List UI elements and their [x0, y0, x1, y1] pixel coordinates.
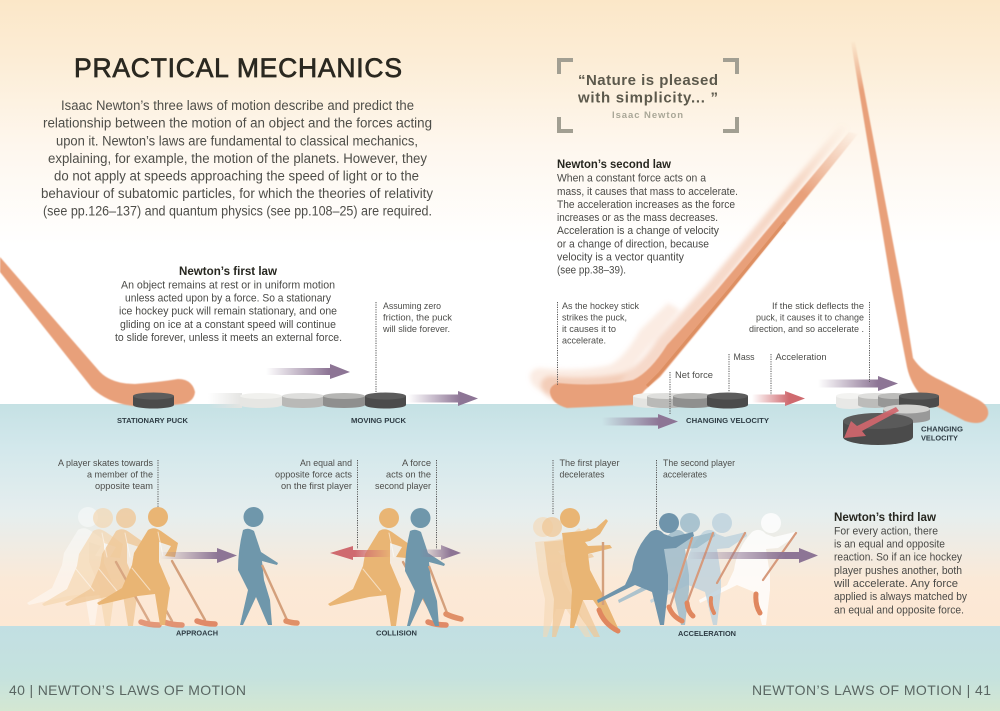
text: Newton's first law: ice hockey puck will remain stationary, and one — [119, 306, 337, 318]
callout: as the stick strikes: strikes the puck, — [562, 312, 627, 324]
callout: stick deflects the puck — [749, 301, 870, 382]
callout: stick deflects the puck: puck, it causes it to change — [756, 312, 864, 324]
figure: approaching player — [97, 507, 215, 625]
intro text block: Isaac Newton’s three laws of motion describe and predict the — [61, 98, 414, 113]
icons: trailing hockey sticks — [669, 533, 796, 621]
callout: second player accelerates: accelerates — [663, 470, 707, 480]
title: PRACTICAL MECHANICS — [74, 53, 402, 83]
quote with corner brackets: with simplicity... ” — [577, 90, 718, 107]
arrow: deflected puck motion — [818, 376, 898, 391]
text: Newton's third law: player pushes another, both — [834, 565, 962, 577]
callout: player skates towards: opposite team — [95, 481, 153, 492]
label: collision: COLLISION — [376, 628, 417, 638]
callout: first player decelerates — [553, 458, 620, 515]
callout: force on second player: second player — [375, 481, 431, 492]
arrow: approach motion — [160, 548, 237, 563]
figure: decelerating player — [560, 508, 618, 631]
callout: acceleration: Acceleration — [776, 352, 826, 363]
background: sky gradient — [0, 0, 1000, 245]
callout: mass: Mass — [734, 352, 755, 363]
figure: colliding blue player — [405, 508, 461, 626]
text: Newton's second law: Newton’s second law — [557, 159, 671, 171]
background: bottom ice band — [0, 626, 1000, 711]
figure: approaching player ghosts — [27, 507, 146, 626]
text: Newton's second law: When a constant force acts on a — [557, 173, 707, 185]
callout: equal and opposite force: opposite force acts — [275, 470, 352, 480]
callout: force on second player — [375, 458, 436, 549]
label: changing velocity right: CHANGING — [921, 425, 963, 434]
label: changing velocity right — [921, 425, 963, 443]
callout: net force: Net force — [675, 370, 713, 381]
label: acceleration: ACCELERATION — [678, 629, 736, 638]
text: Newton's first law: gliding on ice at a constant speed will continue — [120, 319, 336, 331]
label: moving puck: MOVING PUCK — [351, 416, 407, 425]
callout: as the stick strikes: it causes it to — [562, 324, 616, 335]
icon: left hockey stick — [0, 257, 195, 406]
intro text block: do not apply at speeds approaching the speed of light or to the — [54, 168, 419, 184]
figure: colliding yellow player — [328, 508, 446, 626]
text: Newton's first law: to slide forever, unless it meets an external force. — [115, 332, 342, 344]
intro text block: (see pp.126–137) and quantum physics (see pp.108–25) are required. — [43, 204, 432, 218]
text: Newton's second law: (see pp.38–39). — [557, 265, 626, 277]
text: Newton's first law: unless acted upon by a force. So a stationary — [125, 292, 331, 304]
intro text block: behaviour of subatomic particles, for which the theories of relativity — [41, 186, 433, 201]
quote with corner brackets — [559, 60, 737, 131]
text: Newton's second law: The acceleration increases as the force — [557, 199, 735, 211]
text: Newton's first law: An object remains at rest or in uniform motion — [121, 279, 335, 291]
text: Newton's second law: mass, it causes that mass to accelerate. — [557, 186, 738, 198]
background: ice and lower gradient — [0, 404, 1000, 626]
callout: assuming zero friction: friction, the puck — [383, 312, 452, 324]
callout: force on second player: acts on the — [386, 470, 431, 480]
arrow: lower motion arrow — [408, 391, 478, 406]
arrow: action force — [420, 545, 461, 560]
label: changing velocity right: VELOCITY — [921, 434, 958, 443]
text: Newton's second law: Acceleration is a change of velocity — [557, 225, 719, 237]
text: Newton's third law: reaction. So if an ice hockey — [834, 552, 962, 564]
callout: stick deflects the puck: If the stick deflects the — [772, 301, 864, 312]
figure: decelerating player ghosts — [533, 517, 600, 637]
text: Newton's third law: will accelerate. Any force — [833, 578, 958, 590]
label: approach: APPROACH — [176, 628, 218, 638]
text: Newton's first law — [115, 266, 342, 344]
changing velocity puck sequence — [633, 392, 748, 409]
icons: ghost hockey sticks — [76, 533, 182, 625]
callout: stick deflects the puck: direction, and so accelerate . — [749, 324, 864, 335]
callout: second player accelerates — [656, 458, 735, 530]
icon: deflecting hockey stick — [851, 42, 988, 423]
callout: player skates towards: A player skates towards — [58, 458, 153, 469]
callout: mass — [729, 352, 755, 392]
icon: stationary puck — [133, 392, 174, 409]
quote with corner brackets: Isaac Newton — [612, 110, 683, 121]
callout: equal and opposite force — [275, 458, 358, 549]
callout: first player decelerates: The first player — [560, 458, 620, 469]
callout: player skates towards: a member of the — [87, 470, 153, 480]
label: changing velocity: CHANGING VELOCITY — [686, 416, 769, 425]
icon: motion ghost of striking stick — [530, 125, 849, 401]
arrow: reaction force — [330, 546, 392, 560]
intro text block: upon it. Newton’s laws are fundamental to classical mechanics, — [56, 133, 418, 148]
text: Newton's second law: increases or as the mass decreases. — [557, 212, 718, 224]
arrow: deflected direction — [844, 407, 899, 438]
text: Newton's third law: Newton’s third law — [834, 512, 936, 524]
callout: player skates towards — [58, 458, 158, 508]
callout: assuming zero friction — [376, 301, 452, 392]
callout: net force — [670, 370, 713, 415]
callout: as the stick strikes — [558, 301, 639, 385]
text: Newton's second law: or a change of direction, because — [557, 238, 709, 250]
callout: assuming zero friction: Assuming zero — [383, 301, 441, 312]
text: Newton's second law: velocity is a vector quantity — [557, 252, 684, 264]
quote with corner brackets: “Nature is pleased — [578, 72, 718, 89]
text: Newton's second law — [557, 159, 738, 277]
intro text block: explaining, for example, the motion of the planets. However, they — [48, 151, 427, 166]
label: stationary puck: STATIONARY PUCK — [117, 416, 188, 425]
callout: equal and opposite force: on the first player — [281, 481, 352, 492]
moving puck sequence — [208, 392, 406, 409]
text: Newton's third law — [833, 512, 967, 616]
callout: force on second player: A force — [402, 458, 431, 469]
text: Newton's third law: For every action, there — [834, 525, 938, 537]
footer: right page: NEWTON’S LAWS OF MOTION | 41 — [752, 682, 991, 698]
callout: second player accelerates: The second player — [663, 458, 735, 469]
text: Newton's third law: is an equal and opposite — [834, 538, 945, 550]
arrow: upper motion arrow — [266, 364, 350, 379]
text: Newton's third law: applied is always matched by — [834, 591, 967, 603]
footer: left page: 40 | NEWTON’S LAWS OF MOTION — [9, 682, 246, 698]
intro text block: relationship between the motion of an object and the forces acting — [43, 116, 432, 131]
arrow: acceleration — [752, 391, 805, 406]
text: Newton's third law: an equal and opposite force. — [834, 604, 964, 616]
callout: as the stick strikes: accelerate. — [562, 336, 606, 346]
figure: accelerating player — [597, 513, 694, 625]
callout: as the stick strikes: As the hockey stick — [562, 301, 639, 312]
deflected pucks — [836, 392, 939, 445]
arrow: net force — [602, 414, 678, 429]
icon: striking hockey stick — [550, 132, 858, 408]
callout: acceleration — [771, 352, 826, 395]
text: Newton's first law: Newton’s first law — [179, 266, 277, 278]
callout: assuming zero friction: will slide forever. — [382, 324, 450, 335]
callout: first player decelerates: decelerates — [560, 470, 605, 480]
intro text block — [41, 98, 433, 218]
callout: equal and opposite force: An equal and — [300, 458, 352, 469]
arrow: acceleration motion — [687, 548, 818, 563]
figure: accelerating player ghosts — [618, 513, 796, 625]
figure: standing opposing player — [238, 507, 297, 625]
